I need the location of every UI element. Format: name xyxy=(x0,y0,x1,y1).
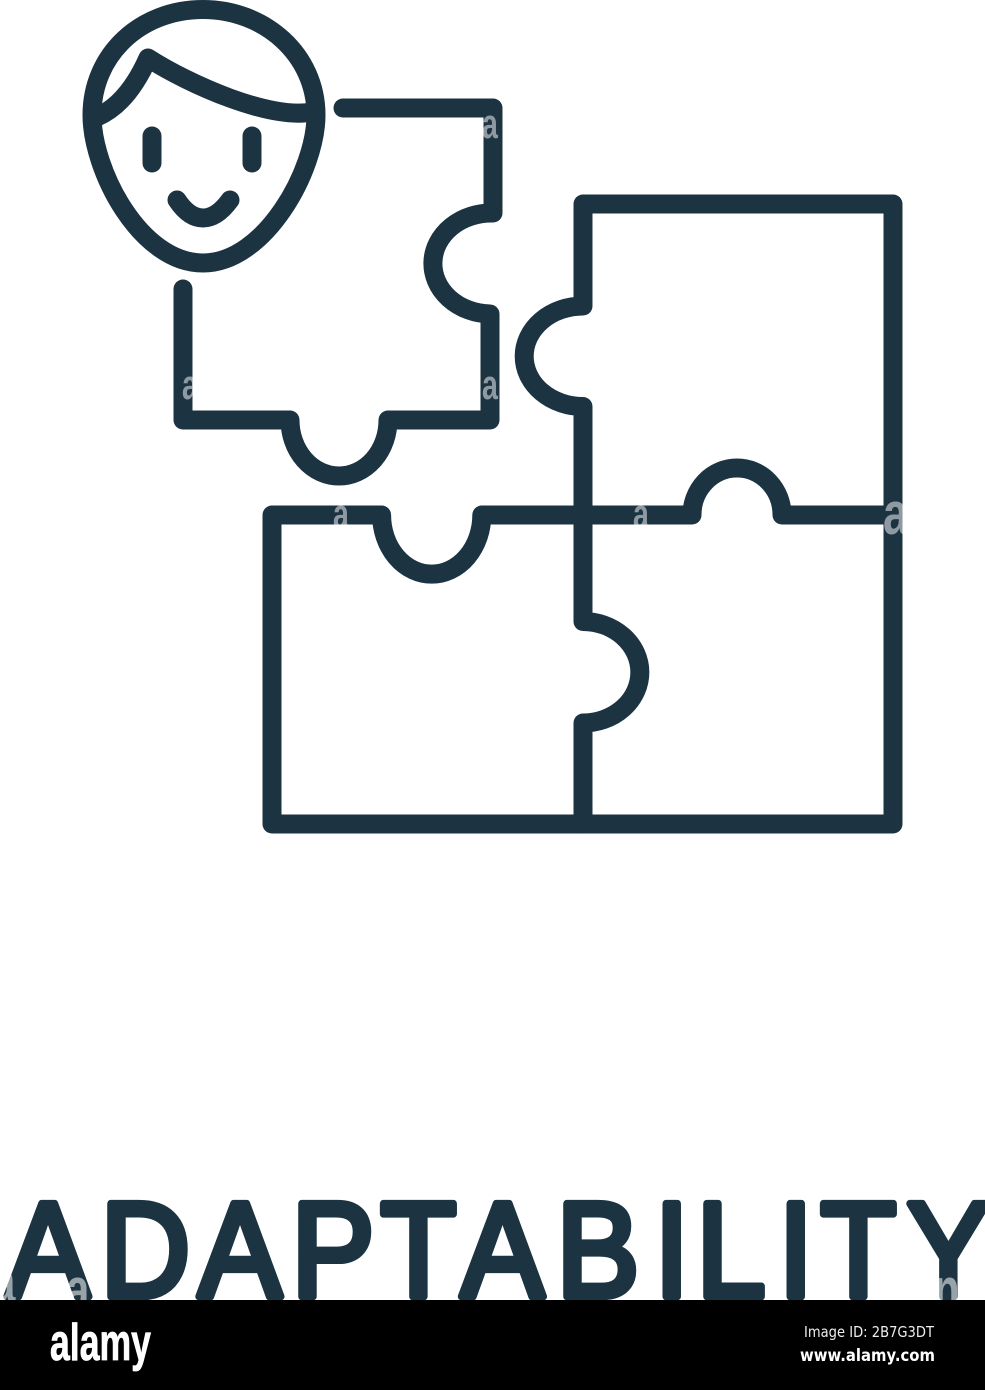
hair fringe xyxy=(97,58,312,117)
footer bar xyxy=(0,1300,985,1390)
watermark marks over icon: a xyxy=(883,481,908,548)
watermark marks over title: a xyxy=(66,1256,90,1323)
puzzle piece: top right xyxy=(524,204,893,515)
watermark marks over icon: a xyxy=(182,360,199,408)
image id: Image ID: 2B7G3DT xyxy=(804,1323,935,1341)
left eye xyxy=(142,136,162,163)
logo: alamy: alamy xyxy=(50,1314,151,1372)
icon: smiling face xyxy=(92,10,316,263)
watermark marks over icon: a xyxy=(333,489,350,537)
watermark marks over icon: a xyxy=(633,489,650,537)
right eye xyxy=(242,136,262,163)
watermark marks over title xyxy=(0,1248,960,1323)
watermark marks over icon: a xyxy=(482,99,499,147)
puzzle piece: detached xyxy=(183,108,493,476)
title: ADAPTABILITY xyxy=(7,1176,985,1326)
puzzle piece: bottom left xyxy=(272,515,640,824)
puzzle piece: bottom right xyxy=(583,515,893,824)
smile xyxy=(177,200,230,218)
watermark marks over title: n xyxy=(934,1256,960,1323)
website: www.alamy.com xyxy=(800,1346,935,1366)
icon: adaptability person and puzzle xyxy=(92,10,893,824)
watermark marks over icon xyxy=(182,99,908,548)
watermark marks over icon: a xyxy=(482,360,499,408)
face outline xyxy=(92,10,316,263)
